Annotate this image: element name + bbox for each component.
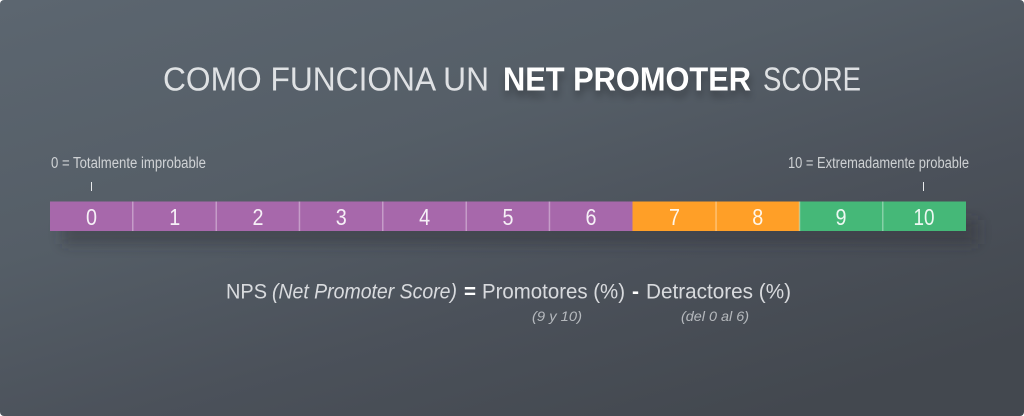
score numbers: 3 <box>336 204 347 230</box>
label: highest score: 10 = Extremadamente probable <box>788 155 969 172</box>
score numbers: 0 <box>86 204 97 230</box>
note: detractors range: (del 0 al 6) <box>681 308 749 324</box>
formula <box>226 280 791 303</box>
score numbers: 1 <box>169 204 180 230</box>
score numbers: 6 <box>586 204 596 230</box>
score numbers: 5 <box>502 204 514 230</box>
title: COMO FUNCIONA UN <box>163 60 489 98</box>
score numbers <box>86 204 934 230</box>
title <box>163 60 861 104</box>
score numbers: 2 <box>252 204 264 230</box>
title: NET PROMOTER <box>503 60 751 98</box>
formula: Detractores (%) <box>646 280 791 303</box>
score numbers: 10 <box>914 204 934 230</box>
label: lowest score: 0 = Totalmente improbable <box>51 155 206 172</box>
title: SCORE <box>763 60 861 98</box>
bar shadow <box>62 220 978 244</box>
title: NET PROMOTER <box>504 67 752 104</box>
detractors segment 0 to 6 <box>50 202 632 231</box>
tick: highest score <box>923 182 924 191</box>
formula: Promotores (%) <box>482 280 625 303</box>
passives segment 7 to 8 <box>632 202 800 231</box>
tick: lowest score <box>91 182 92 191</box>
score numbers: 7 <box>669 204 680 230</box>
score scale bar <box>50 202 966 231</box>
formula: - <box>632 280 639 303</box>
promoters segment 9 to 10 <box>800 202 966 231</box>
formula: (Net Promoter Score) <box>272 280 457 303</box>
note: promoters range: (9 y 10) <box>532 308 582 324</box>
score numbers: 8 <box>752 204 763 230</box>
score numbers: 4 <box>419 204 430 230</box>
formula: = <box>464 280 476 303</box>
score numbers: 9 <box>836 204 846 230</box>
formula: NPS <box>226 280 267 303</box>
